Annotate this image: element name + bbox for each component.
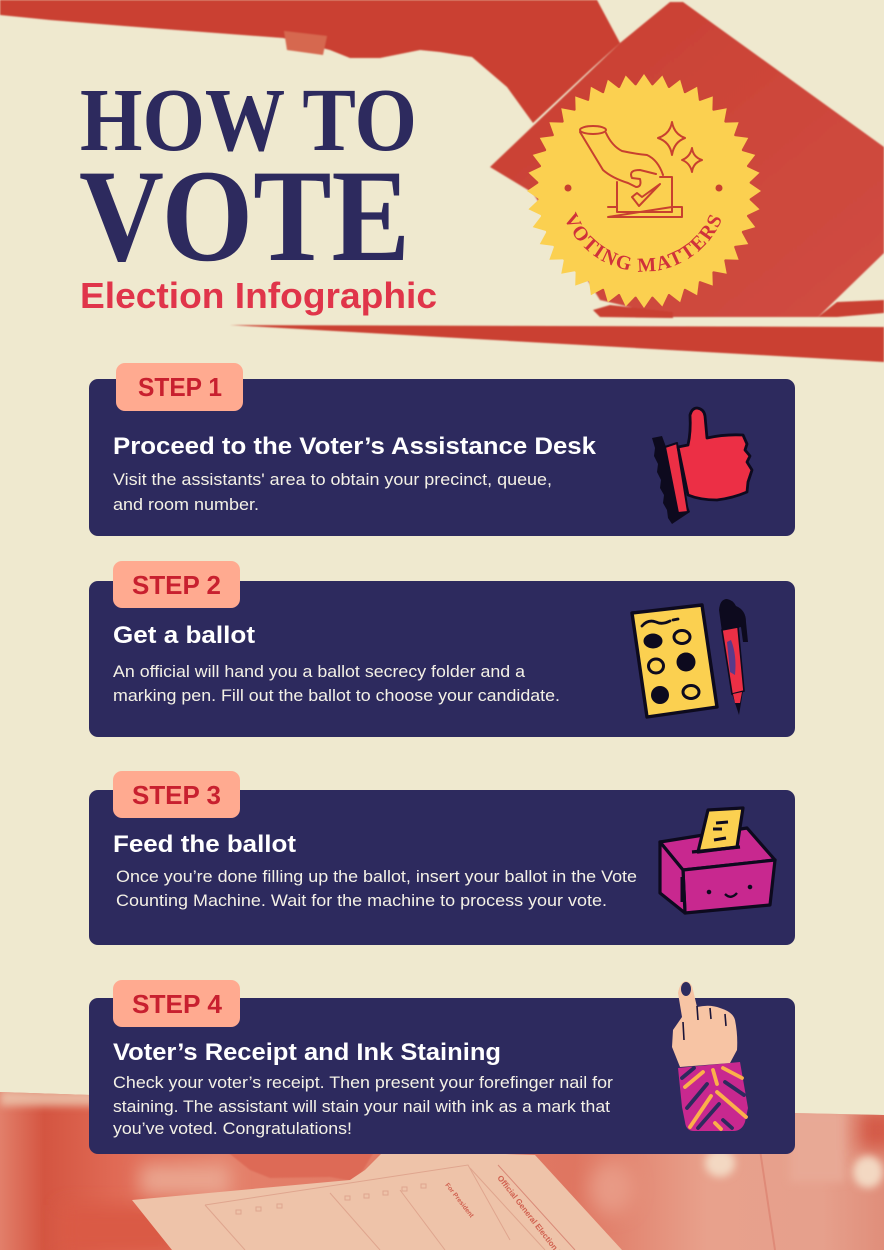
step heading: Voter’s Receipt and Ink Staining	[113, 1039, 501, 1066]
card background	[89, 581, 795, 737]
card background	[89, 379, 795, 536]
step body	[116, 867, 637, 910]
step label: STEP 3	[132, 780, 221, 810]
step badge	[116, 363, 243, 411]
card background	[89, 998, 795, 1154]
photo: ballot paper at bottom	[0, 1085, 884, 1250]
step badge	[113, 771, 240, 818]
step body: Check your voter’s receipt. Then present your forefinger nail for	[113, 1073, 613, 1092]
seal: voting matters	[527, 74, 761, 308]
photo light patch left	[140, 1165, 230, 1195]
seal dot left	[564, 184, 572, 192]
step badge	[113, 561, 240, 608]
step badge	[113, 980, 240, 1027]
hand clip detail	[284, 31, 327, 55]
step label: STEP 2	[132, 570, 221, 600]
photo light blob 2	[853, 1156, 883, 1188]
title	[79, 71, 417, 289]
step body: Once you’re done filling up the ballot, insert your ballot in the Vote	[116, 867, 637, 886]
step label: STEP 1	[138, 372, 222, 402]
ballot section label: For President	[443, 1182, 475, 1220]
step body: Counting Machine. Wait for the machine to process your vote.	[116, 891, 607, 910]
photo dark top right corner	[858, 1110, 884, 1150]
photo light top edge	[0, 1092, 89, 1111]
photo: hand dropping ballot into box	[0, 0, 884, 362]
step body: staining. The assistant will stain your nail with ink as a mark that	[113, 1097, 610, 1116]
icon: thumbs up	[652, 408, 752, 524]
subtitle: Election Infographic	[80, 275, 437, 316]
step body: marking pen. Fill out the ballot to choose your candidate.	[113, 686, 560, 705]
step body	[113, 1073, 613, 1138]
step body: An official will hand you a ballot secrecy folder and a	[113, 662, 526, 681]
brush strip left	[593, 305, 673, 318]
hand holding paper	[230, 1154, 372, 1180]
photo base	[0, 1085, 884, 1250]
seal dot right	[716, 184, 722, 192]
step heading: Feed the ballot	[113, 831, 296, 858]
step body: you’ve voted. Congratulations!	[113, 1119, 352, 1138]
seal starburst	[502, 49, 786, 333]
step body: Visit the assistants' area to obtain your precinct, queue,	[113, 470, 552, 489]
seal curved path holder	[561, 207, 726, 272]
photo light top right	[790, 1112, 845, 1182]
step body	[113, 662, 560, 705]
ballot paper	[132, 1150, 622, 1250]
step heading: Proceed to the Voter’s Assistance Desk	[113, 433, 597, 460]
lower brush band	[230, 325, 884, 362]
photo light blob 1	[705, 1149, 735, 1177]
icon: inked finger	[672, 981, 748, 1131]
panel: step 2	[89, 561, 795, 737]
brush strip right	[818, 300, 884, 317]
photo light spot centre	[590, 1162, 634, 1214]
seal text: VOTING MATTERS	[566, 212, 721, 272]
ballot box shape	[490, 2, 884, 317]
title line: vote: VOTE	[79, 142, 410, 289]
icon: ballot sheet and pen	[632, 599, 748, 717]
arm and hand	[0, 0, 620, 123]
title line: how to: HOW TO	[80, 71, 417, 170]
step body: and room number.	[113, 495, 259, 514]
card background	[89, 790, 795, 945]
panel: step 3	[89, 771, 795, 945]
panel: step 4	[89, 980, 795, 1154]
photo dark strip lower right	[760, 1150, 775, 1250]
seal icon: hand casting ballot	[580, 122, 702, 217]
step body	[113, 470, 552, 514]
step heading: Get a ballot	[113, 622, 255, 649]
step label: STEP 4	[132, 989, 223, 1019]
ballot paper details	[205, 1165, 575, 1250]
panel: step 1	[89, 363, 795, 536]
photo dark lower left	[84, 1202, 172, 1250]
icon: smiling ballot box	[660, 808, 775, 913]
